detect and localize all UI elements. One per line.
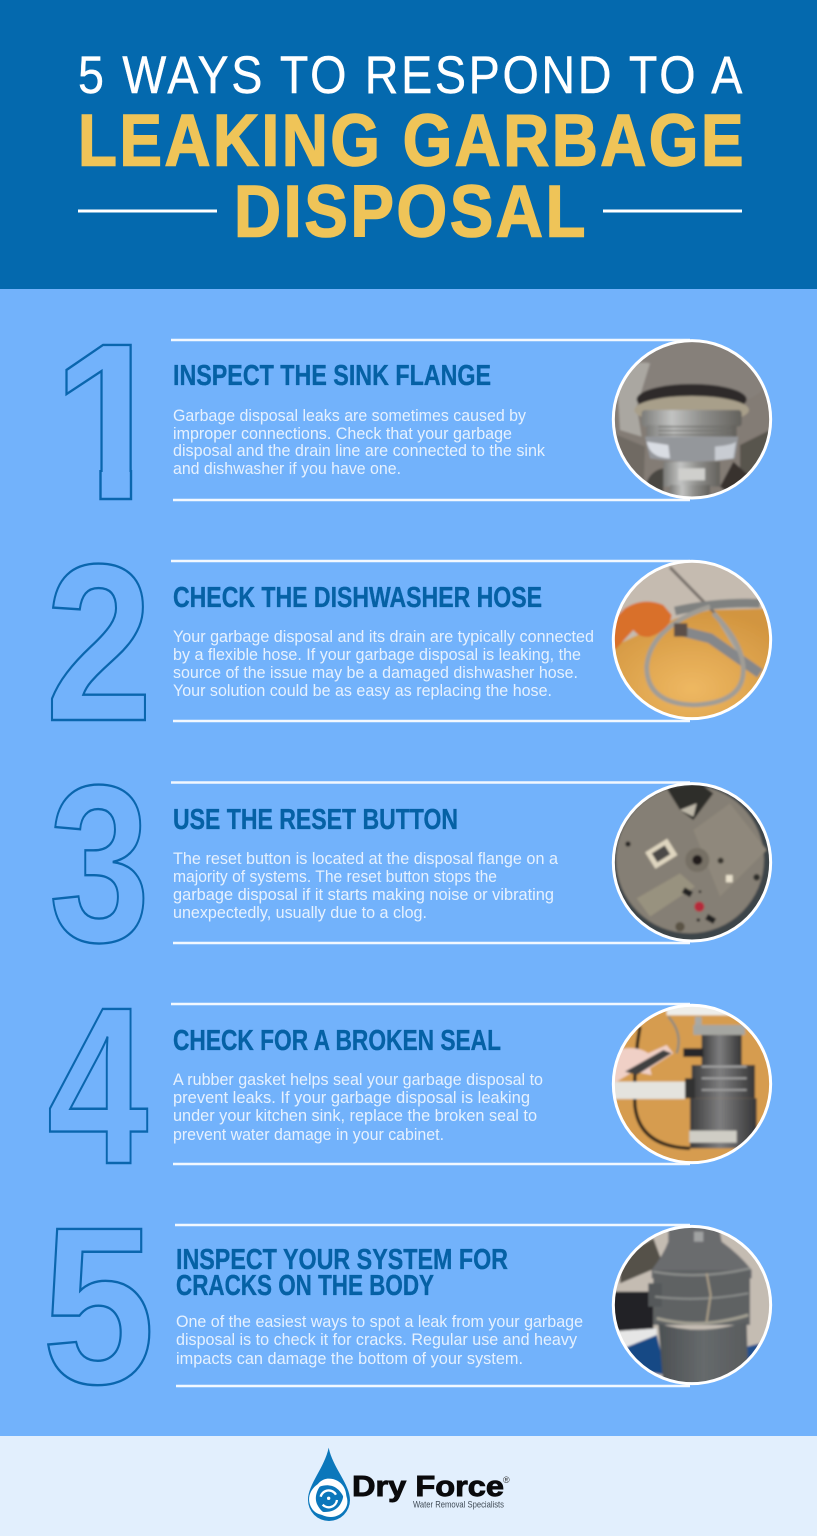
body 4: A rubber gasket helps seal your garbage disposal to — [173, 1070, 543, 1089]
step 2 — [50, 560, 772, 722]
body 1: and dishwasher if you have one. — [173, 459, 401, 478]
number 5: 5 — [42, 1181, 155, 1431]
body 5: disposal is to check it for cracks. Regular use and heavy — [176, 1330, 578, 1349]
number 1 — [65, 344, 132, 500]
heading 1: INSPECT THE SINK FLANGE — [173, 360, 491, 392]
photo 5: cracked disposal body — [610, 1223, 773, 1390]
body 2: source of the issue may be a damaged dishwasher hose. — [173, 663, 578, 682]
body 1 — [173, 406, 546, 478]
photo 1: sink flange — [610, 337, 773, 503]
body 4: under your kitchen sink, replace the broken seal to — [173, 1106, 537, 1125]
step 4 — [48, 1002, 772, 1166]
body 5: One of the easiest ways to spot a leak from your garbage — [176, 1312, 583, 1331]
footer band — [0, 1436, 817, 1536]
body 4 — [173, 1070, 543, 1144]
number 2: 2 — [45, 518, 153, 768]
body 3: unexpectedly, usually due to a clog. — [173, 903, 427, 922]
heading 2: CHECK THE DISHWASHER HOSE — [173, 582, 542, 614]
heading 5 — [176, 1244, 508, 1302]
body 3: garbage disposal if it starts making noise or vibrating — [173, 885, 554, 904]
title line 1: 5 WAYS TO RESPOND TO A — [78, 46, 745, 105]
photo 4: disposal under sink — [610, 1003, 773, 1167]
body 4: prevent water damage in your cabinet. — [173, 1125, 444, 1144]
heading 5: INSPECT YOUR SYSTEM FOR — [176, 1244, 508, 1276]
step 1 — [65, 338, 772, 502]
body 5 — [176, 1312, 583, 1368]
header banner — [0, 0, 817, 289]
title line 3: DISPOSAL — [234, 172, 588, 252]
brand name: Dry Force — [352, 1471, 504, 1503]
body 3: The reset button is located at the disposal flange on a — [173, 849, 559, 868]
body 2: by a flexible hose. If your garbage disposal is leaking, the — [173, 645, 581, 664]
number 3: 3 — [49, 739, 150, 989]
panel: steps background — [0, 289, 817, 1436]
heading 5: CRACKS ON THE BODY — [176, 1270, 434, 1302]
body 2: Your garbage disposal and its drain are typically connected — [173, 627, 594, 646]
body 5: impacts can damage the bottom of your system. — [176, 1349, 523, 1368]
logo: Dry Force — [303, 1448, 510, 1523]
body 1: Garbage disposal leaks are sometimes caused by — [173, 406, 527, 425]
photo 3: reset button — [610, 780, 773, 947]
number 4: 4 — [47, 961, 148, 1211]
number 1: 1 — [52, 297, 170, 547]
heading 4: CHECK FOR A BROKEN SEAL — [173, 1025, 501, 1057]
step 3 — [52, 781, 772, 945]
body 3: majority of systems. The reset button stops the — [173, 867, 497, 886]
body 2: Your solution could be as easy as replacing the hose. — [173, 681, 552, 700]
tagline: Water Removal Specialists — [413, 1500, 504, 1510]
body 1: improper connections. Check that your garbage — [173, 424, 512, 443]
icon: water drop with swirl — [303, 1448, 353, 1523]
body 4: prevent leaks. If your garbage disposal is leaking — [173, 1088, 530, 1107]
body 1: disposal and the drain line are connected to the sink — [173, 441, 546, 460]
body 2 — [173, 627, 594, 700]
step 5 — [47, 1224, 772, 1388]
registered mark: ® — [503, 1475, 510, 1485]
heading 3: USE THE RESET BUTTON — [173, 804, 458, 836]
photo 2: dishwasher hose — [610, 560, 773, 723]
body 3 — [173, 849, 559, 922]
